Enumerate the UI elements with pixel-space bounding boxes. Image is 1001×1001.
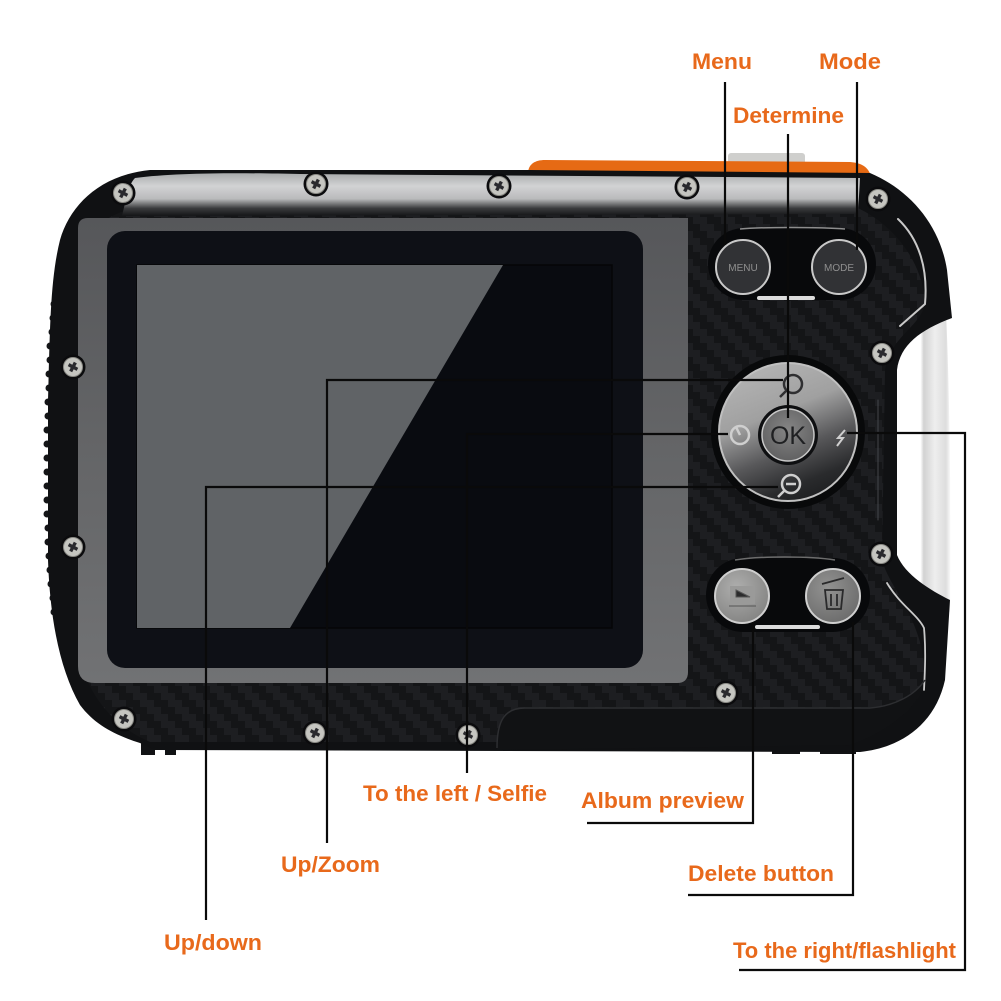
OK button: OK [770, 422, 806, 450]
lower button housing [706, 557, 870, 632]
label: to the left / selfie: To the left / Selfie [363, 781, 547, 806]
leader line: up/zoom [327, 380, 783, 843]
icon: self timer [731, 426, 749, 444]
bottom feet [141, 742, 856, 755]
top silver trim [122, 173, 860, 216]
leader line: up/down [206, 487, 778, 920]
screws [60, 172, 894, 748]
leader line: determine [787, 134, 789, 418]
camera body [48, 170, 952, 752]
label: menu: Menu [692, 49, 752, 74]
lower right dark panel [497, 680, 925, 750]
leader line: delete button [688, 622, 853, 895]
icon: flash [837, 430, 845, 446]
label: delete button: Delete button [688, 861, 834, 886]
leader line: menu [724, 82, 726, 245]
directional pad [711, 355, 865, 509]
label: up/zoom: Up/Zoom [281, 852, 380, 877]
button: album preview [715, 569, 769, 623]
icon: zoom out [778, 475, 800, 497]
label: to the right / flashlight: To the right/flashlight [733, 938, 957, 963]
button: menu: MENU [728, 263, 758, 274]
screen reflection [137, 265, 503, 628]
leader line: to the right / flashlight [739, 433, 965, 970]
grey screen bezel [78, 218, 688, 683]
label: determine: Determine [733, 103, 844, 128]
icon: zoom in [780, 375, 802, 397]
button: menu [716, 240, 770, 294]
leader line: mode [856, 82, 858, 250]
button: mode [812, 240, 866, 294]
leader line: album preview [587, 622, 753, 823]
button: mode: MODE [824, 263, 854, 274]
OK button [758, 405, 818, 465]
label: up/down: Up/down [164, 930, 262, 955]
button: delete [806, 569, 860, 623]
orange top band and shutter button [528, 153, 871, 176]
label: mode: Mode [819, 49, 881, 74]
top button housing [708, 228, 876, 300]
right side trim highlights [878, 219, 926, 690]
left side grip bumps [44, 286, 60, 616]
label: album preview: Album preview [581, 788, 745, 813]
leader line: to the left / selfie [467, 434, 728, 773]
camera strap loop [895, 312, 950, 612]
screen display area [137, 265, 612, 628]
bottom groove [497, 680, 925, 748]
screen [107, 231, 643, 668]
